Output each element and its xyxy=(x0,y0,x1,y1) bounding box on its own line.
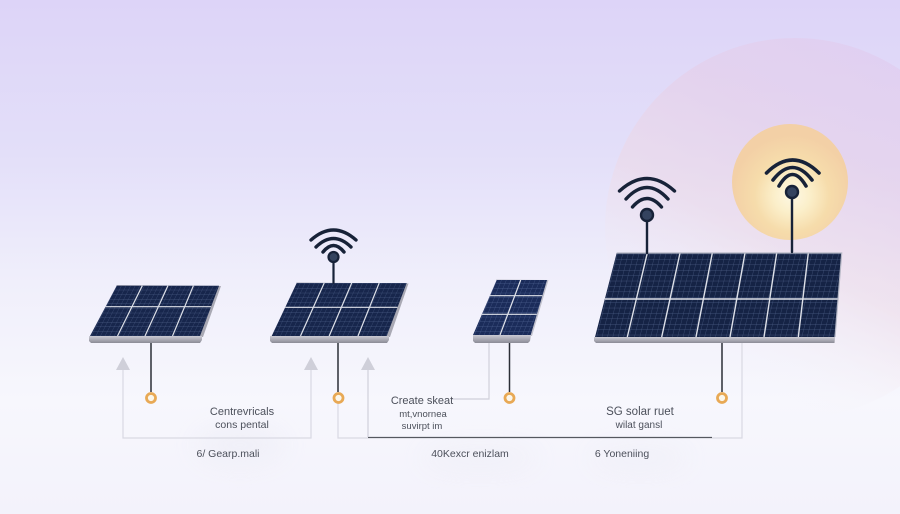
label: create skeat xyxy=(391,395,453,432)
panel 3 xyxy=(473,280,548,343)
label: 40K: 40Kexcr enizlam xyxy=(431,448,509,460)
connector lines xyxy=(123,343,742,438)
label: create skeat: Create skeat xyxy=(391,395,453,407)
panel 1 xyxy=(89,285,221,343)
label: create skeat: suvirpt im xyxy=(402,421,442,432)
wifi icon on panel 4 left xyxy=(620,178,674,253)
stem and node 3 xyxy=(505,343,514,402)
label: centrevricals: Centrevricals xyxy=(210,406,275,418)
pink halo xyxy=(605,38,900,418)
label: SG solar xyxy=(606,406,675,431)
wifi icon on sun xyxy=(766,160,819,252)
label: SG solar: wilat gansl xyxy=(615,420,662,431)
label: create skeat: mt,vnornea xyxy=(399,409,447,420)
stem and node 4 xyxy=(718,343,726,402)
sun xyxy=(732,124,848,240)
soft label shadows xyxy=(195,427,690,468)
arrowheads xyxy=(116,357,375,370)
stem and node 2 xyxy=(334,343,343,402)
label: centrevricals: cons pental xyxy=(215,419,269,431)
wifi icon on panel 2 xyxy=(311,230,356,283)
panel 4 xyxy=(594,253,842,343)
stem and node 1 xyxy=(146,343,156,402)
label: yoneniing: 6 Yoneniing xyxy=(595,448,649,460)
label: SG solar: SG solar ruet xyxy=(606,406,675,418)
label: centrevricals xyxy=(210,406,275,431)
label: gearp: 6/ Gearp.mali xyxy=(196,448,260,460)
panel 2 xyxy=(270,282,408,343)
